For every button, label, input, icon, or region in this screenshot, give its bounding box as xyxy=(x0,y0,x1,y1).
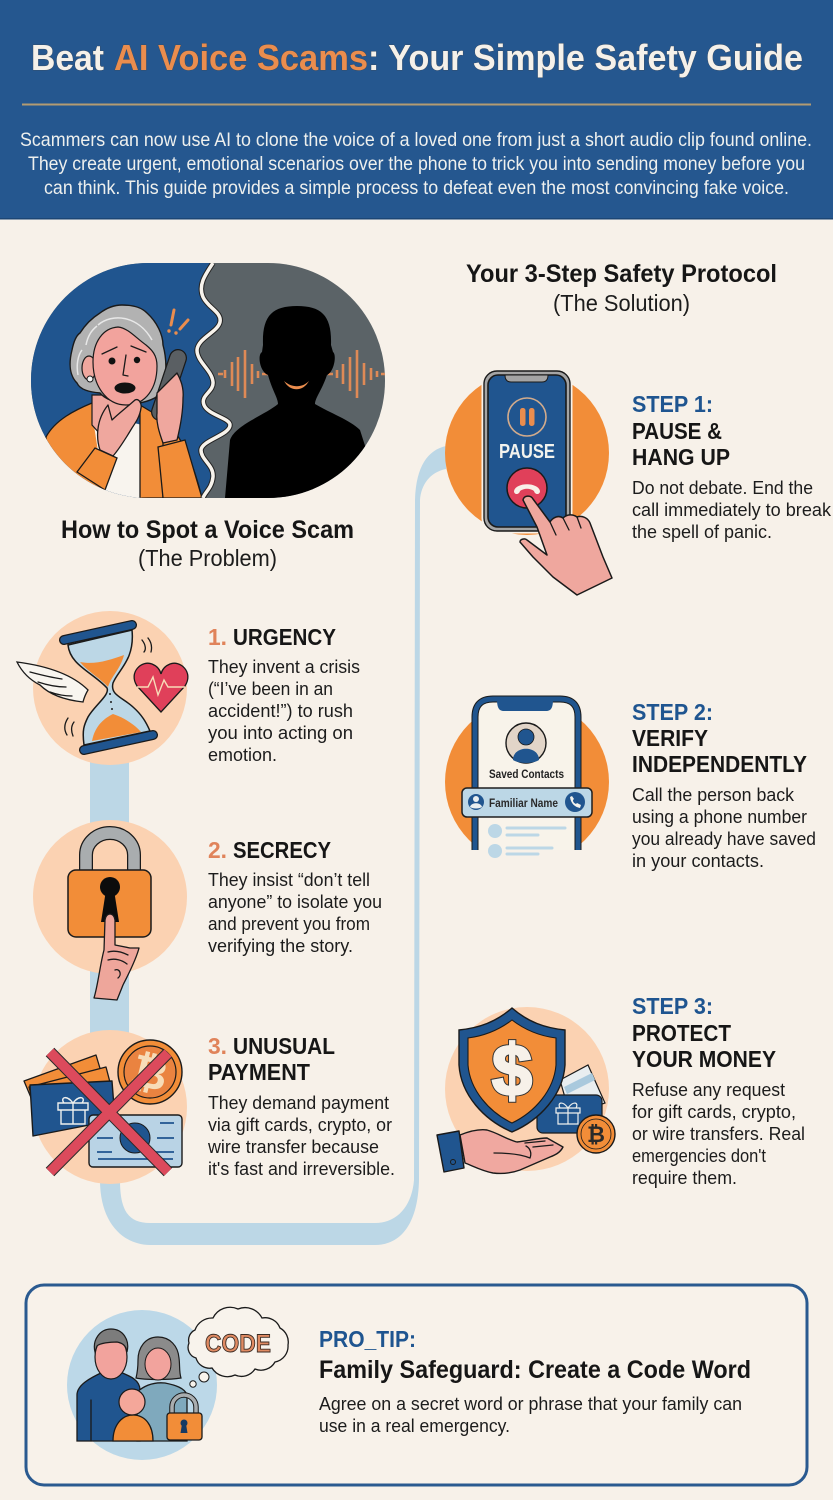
text: unusual payment: it's fast and irreversible. xyxy=(208,1158,395,1179)
text: step 3: YOUR MONEY xyxy=(632,1046,776,1072)
icon: saved contacts phone xyxy=(445,699,609,875)
text: step 3: or wire transfers. Real xyxy=(632,1123,805,1144)
text: unusual payment xyxy=(207,1033,395,1179)
text: step 1: STEP 1: xyxy=(632,391,713,417)
title: Beat xyxy=(31,37,104,78)
text: step 1: Do not debate. End the xyxy=(632,477,813,498)
text: step 3: Refuse any request xyxy=(632,1079,785,1100)
heading: safety protocol: (The Solution) xyxy=(553,290,690,316)
text: urgency: URGENCY xyxy=(233,624,336,650)
text: urgency xyxy=(208,624,360,765)
pro tip text xyxy=(319,1326,751,1436)
heading: how to spot a voice scam xyxy=(61,516,354,571)
title: AI Voice Scams xyxy=(114,37,368,78)
text: step 2: Call the person back xyxy=(632,784,795,805)
text: secrecy: 2. xyxy=(208,837,227,863)
text: secrecy: anyone” to isolate you xyxy=(208,891,382,912)
text: step 3: PROTECT xyxy=(632,1020,731,1046)
heading: how to spot a voice scam: How to Spot a Voice Scam xyxy=(61,516,354,544)
text: step 2: you already have saved xyxy=(632,828,816,849)
text: step 1 xyxy=(632,391,832,542)
text: urgency: They invent a crisis xyxy=(208,656,360,677)
text: step 1: PAUSE & xyxy=(632,418,722,444)
icon: shield and hand: ₿ xyxy=(587,1123,605,1148)
icon: saved contacts phone: Saved Contacts xyxy=(489,767,564,781)
text: step 3: emergencies don't xyxy=(632,1145,766,1166)
title xyxy=(31,37,803,78)
text: urgency: (“I’ve been in an xyxy=(208,678,333,699)
text: secrecy: They insist “don’t tell xyxy=(208,869,370,890)
text: secrecy: and prevent you from xyxy=(208,913,370,934)
text: unusual payment: wire transfer because xyxy=(207,1136,379,1157)
icon: saved contacts phone: Familiar Name xyxy=(489,796,558,810)
text: step 2: STEP 2: xyxy=(632,699,713,725)
text: unusual payment: via gift cards, crypto, or xyxy=(208,1114,392,1135)
text: urgency: emotion. xyxy=(208,744,277,765)
icon: family with code word xyxy=(67,1307,288,1460)
text: step 3: require them. xyxy=(632,1167,737,1188)
text: step 1: the spell of panic. xyxy=(632,521,772,542)
text: step 2: in your contacts. xyxy=(632,850,764,871)
icon: shield and hand: $ xyxy=(492,1031,532,1111)
intro paragraph xyxy=(20,129,812,199)
text: secrecy: verifying the story. xyxy=(208,935,353,956)
text: step 2: VERIFY xyxy=(632,725,708,751)
text: step 3: for gift cards, crypto, xyxy=(632,1101,796,1122)
text: step 2: using a phone number xyxy=(632,806,807,827)
connector path xyxy=(90,446,446,1245)
icon: phone with pause screen: PAUSE xyxy=(499,441,555,463)
text: unusual payment: PAYMENT xyxy=(208,1059,310,1085)
title: : Your Simple Safety Guide xyxy=(368,37,803,78)
icon: padlock with finger xyxy=(33,820,187,1000)
pro tip text: Agree on a secret word or phrase that your family can xyxy=(319,1393,742,1414)
text: urgency: 1. xyxy=(208,624,227,650)
text: step 1: call immediately to break xyxy=(632,499,832,520)
icon: phone with pause screen xyxy=(445,370,612,595)
text: step 2: INDEPENDENTLY xyxy=(632,751,807,777)
icon: shield and hand xyxy=(437,1007,615,1173)
text: unusual payment: 3. xyxy=(208,1033,227,1059)
text: step 2 xyxy=(632,699,816,871)
icon: crossed-out payments xyxy=(24,1030,187,1184)
heading: safety protocol xyxy=(466,260,777,316)
text: step 3: STEP 3: xyxy=(632,993,713,1019)
text: urgency: you into acting on xyxy=(208,722,353,743)
text: secrecy: SECRECY xyxy=(233,837,331,863)
heading: safety protocol: Your 3-Step Safety Protocol xyxy=(466,260,777,288)
icon: family with code word: CODE xyxy=(205,1330,271,1358)
pro tip text: Family Safeguard: Create a Code Word xyxy=(319,1356,751,1384)
text: unusual payment: They demand payment xyxy=(208,1092,389,1113)
text: step 1: HANG UP xyxy=(632,444,730,470)
panel: pro tip xyxy=(26,1285,807,1485)
icon: crossed-out payments: ₿ xyxy=(126,1044,173,1103)
heading: how to spot a voice scam: (The Problem) xyxy=(138,545,277,571)
pro tip text: PRO_TIP: xyxy=(319,1326,416,1352)
illustration: scared woman vs. silhouette xyxy=(31,263,385,498)
text: urgency: accident!”) to rush xyxy=(208,700,353,721)
icon: shield and hand: $ xyxy=(492,1031,532,1111)
text: unusual payment: UNUSUAL xyxy=(233,1033,335,1059)
text: step 3 xyxy=(632,993,805,1188)
header banner xyxy=(0,0,833,220)
text: secrecy xyxy=(208,837,382,956)
icon: hourglass with wing and heart xyxy=(17,611,188,765)
pro tip text: use in a real emergency. xyxy=(319,1415,510,1436)
